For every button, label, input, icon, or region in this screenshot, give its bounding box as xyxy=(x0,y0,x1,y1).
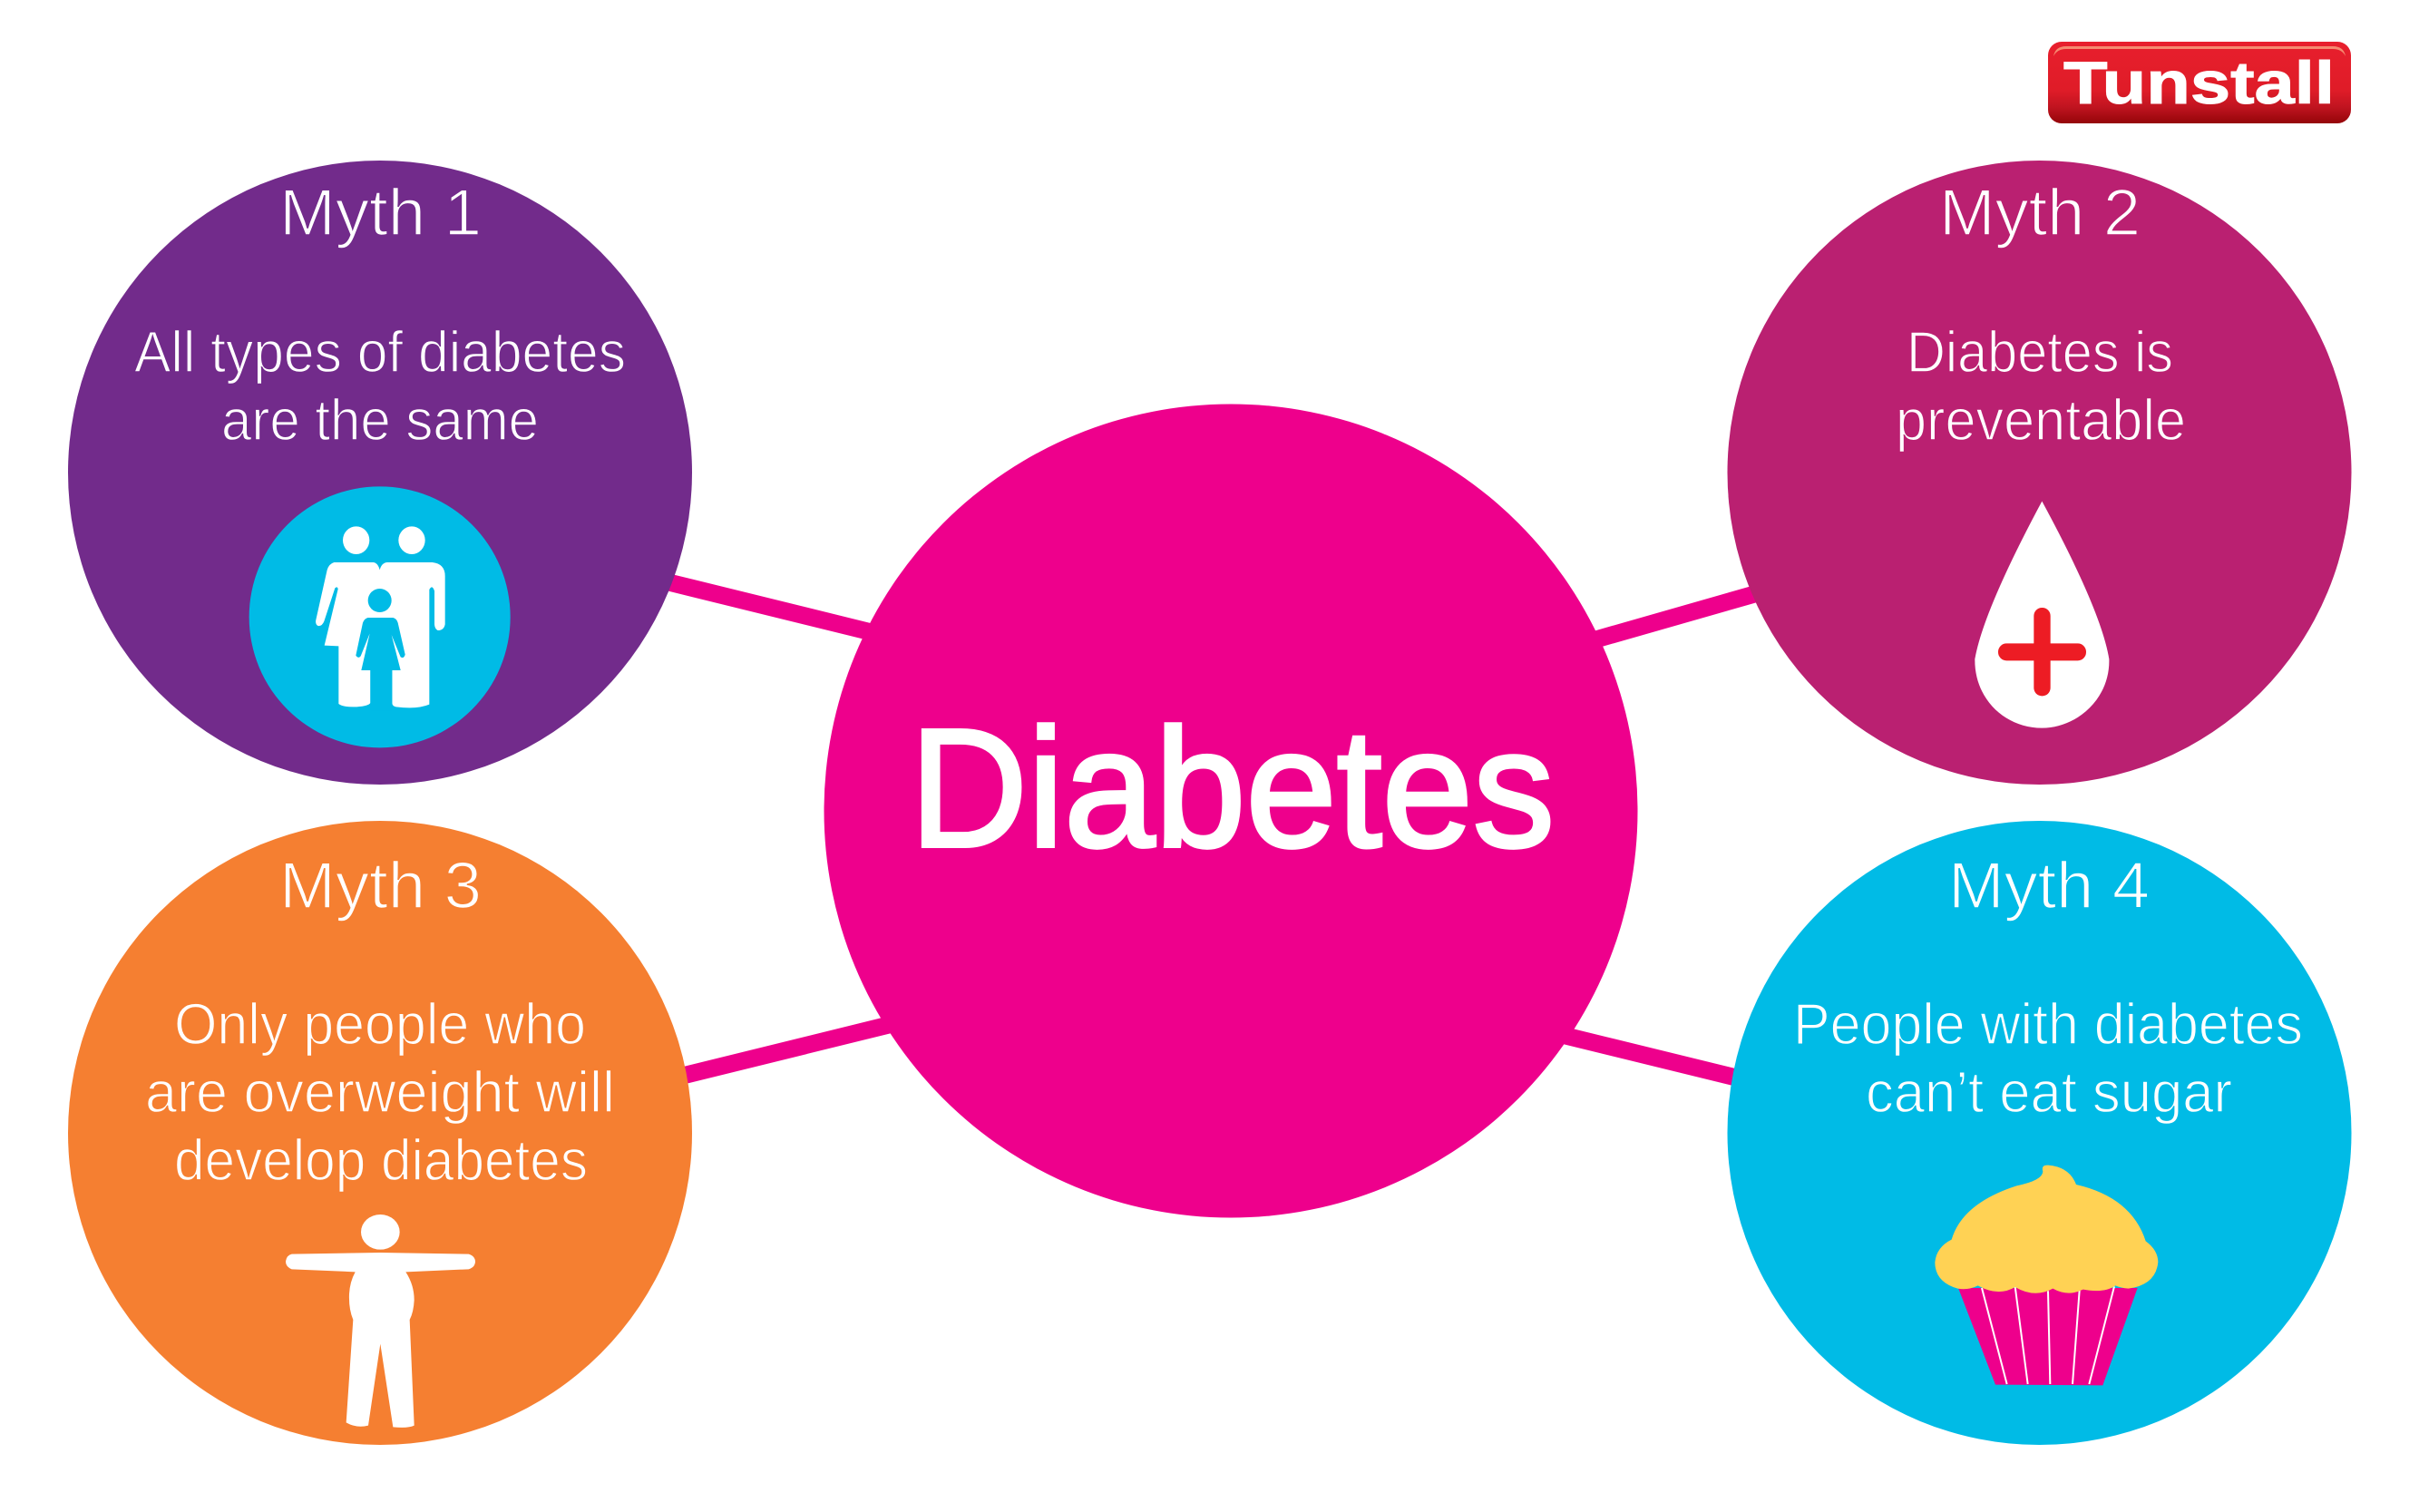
heading: myth 3: Myth 3 xyxy=(279,850,482,922)
central circle: Diabetes xyxy=(824,405,1638,1217)
panel: myth 1 xyxy=(68,161,692,785)
heading: myth 4: Myth 4 xyxy=(1948,850,2150,922)
text: myth 1 statement: All types of diabetes xyxy=(134,319,626,385)
panel: myth 3 xyxy=(68,821,692,1445)
icon: cupcake xyxy=(1935,1166,2158,1385)
heading: myth 1: Myth 1 xyxy=(279,177,482,249)
heading: myth 2: Myth 2 xyxy=(1939,177,2141,249)
text: myth 1 statement: are the same xyxy=(221,387,539,453)
text: myth 2 statement: preventable xyxy=(1896,387,2186,453)
text: myth 2 statement: Diabetes is xyxy=(1907,319,2173,385)
text: myth 4 statement: can’t eat sugar xyxy=(1866,1059,2232,1125)
text: myth 2 statement xyxy=(1896,319,2186,453)
logo: Tunstall xyxy=(2048,42,2351,123)
text: myth 3 statement: are overweight will xyxy=(145,1059,615,1125)
logo: Tunstall: Tunstall xyxy=(2063,49,2335,116)
central circle: Diabetes: Diabetes xyxy=(910,695,1555,883)
text: myth 3 statement: Only people who xyxy=(174,991,586,1057)
panel: myth 2 xyxy=(1727,161,2351,785)
text: myth 3 statement xyxy=(145,991,615,1193)
panel: myth 4 xyxy=(1727,821,2351,1445)
icon: overweight person xyxy=(286,1214,475,1428)
icon: family xyxy=(249,486,511,747)
text: myth 4 statement: People with diabetes xyxy=(1793,991,2303,1057)
text: myth 4 statement xyxy=(1793,991,2303,1125)
connector lines xyxy=(662,580,1764,1079)
text: myth 1 statement xyxy=(134,319,626,453)
text: myth 3 statement: develop diabetes xyxy=(174,1127,588,1193)
icon: blood drop with plus xyxy=(1975,502,2109,728)
